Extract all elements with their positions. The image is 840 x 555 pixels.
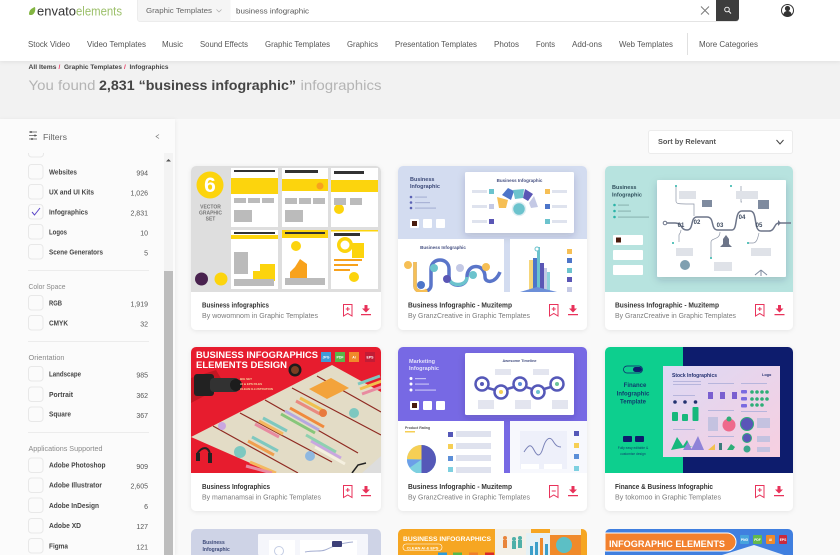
card author: By GranzCreative in Graphic Templates — [408, 492, 530, 502]
filter group: item types: 994 — [136, 170, 148, 178]
thumbnail: green and navy finance — [605, 347, 793, 473]
icon: download — [361, 305, 371, 315]
category links: Photos — [494, 39, 519, 49]
thumbnail: red isometric sheets: AI & EPS FILES — [240, 382, 262, 386]
thumbnail: yellow vector set: 6 — [204, 174, 216, 197]
icon: download — [568, 486, 578, 496]
filters header: Filters — [43, 132, 67, 142]
top navigation bar — [0, 0, 840, 61]
thumbnail: green and navy finance: Infographic — [617, 392, 650, 398]
panel: card lower row orange: CLEAN AI & EPS — [407, 545, 439, 550]
sort dropdown — [648, 130, 792, 154]
thumbnail: green and navy finance: Finance — [624, 383, 647, 389]
filter group: item types: 1,026 — [130, 190, 148, 198]
filter group: applications supported: Adobe XD — [49, 521, 82, 530]
icon: bookmark — [756, 304, 764, 316]
icon: bookmark — [550, 486, 558, 498]
filter group: applications supported: Figma — [49, 542, 69, 550]
thumbnail: blue semicircle: Business — [410, 177, 434, 183]
filter group: color space — [28, 282, 148, 330]
thumbnail: green and navy finance: customise design — [620, 452, 646, 456]
panel: card Business Infographic Muzitemp purple — [398, 347, 587, 511]
card title: Business Infographic - Muzitemp — [615, 300, 719, 310]
card author: By GranzCreative in Graphic Templates — [615, 311, 736, 320]
thumbnail: yellow vector set: VECTOR — [200, 204, 221, 210]
icon: user account — [782, 4, 794, 16]
filter group: item types: 2,831 — [130, 210, 148, 218]
panel: card lower row orange — [398, 529, 587, 555]
thumbnail: teal timeline: 01 — [678, 223, 685, 229]
filter group: orientation — [28, 353, 148, 422]
thumbnail: purple marketing infographic: Marketing — [409, 359, 435, 365]
panel: card lower row grey-blue — [191, 529, 381, 555]
category links: Stock Video — [28, 39, 70, 49]
panel: card lower row grey-blue: Infographic — [202, 547, 230, 553]
panel: card Business Infographic Muzitemp teal — [605, 166, 793, 330]
results heading: infographics — [300, 77, 382, 93]
thumbnail: purple marketing infographic — [398, 347, 587, 474]
filter group: item types: Scene Generators — [49, 248, 103, 256]
thumbnail: blue semicircle — [398, 166, 587, 292]
category links: More Categories — [699, 39, 758, 49]
thumbnail: teal timeline: 05 — [756, 223, 763, 229]
filter group: orientation: Square — [49, 410, 71, 418]
breadcrumb: Graphic Templates — [64, 64, 122, 71]
filter group: item types — [28, 153, 148, 259]
category links: Presentation Templates — [395, 39, 477, 49]
scrollbar — [164, 153, 173, 555]
filter group: applications supported: 127 — [136, 524, 148, 531]
filter group: orientation: 367 — [136, 413, 148, 420]
thumbnail: yellow vector set — [191, 166, 381, 292]
thumbnail: red isometric sheets: CLEAN ILLUSTRATION — [240, 387, 273, 391]
search bar: business infographic — [236, 6, 309, 16]
filter group: item types: Websites — [49, 168, 77, 176]
thumbnail: red isometric sheets: BUSINESS INFOGRAPHICS — [196, 350, 318, 361]
filter group: applications supported: Adobe InDesign — [49, 501, 99, 510]
thumbnail: blue semicircle: Business Infographic — [420, 245, 466, 250]
filter group: applications supported: Applications Supported — [28, 444, 102, 453]
category links: Sound Effects — [200, 39, 248, 49]
search bar — [138, 0, 739, 22]
logo: elements — [76, 4, 122, 18]
filter group: color space: CMYK — [49, 318, 68, 328]
icon: bookmark — [756, 486, 764, 498]
panel: card lower row blue ribbon: EPS — [780, 538, 787, 542]
thumbnail: teal timeline — [605, 166, 793, 292]
logo: envato — [37, 4, 76, 18]
filter group: orientation: 985 — [136, 372, 148, 380]
filter group: color space: Color Space — [28, 282, 66, 291]
results heading — [28, 77, 382, 93]
panel: card lower row blue ribbon: INFOGRAPHIC ELEMENTS — [609, 539, 725, 549]
panel: card lower row blue ribbon: PDF — [754, 538, 761, 542]
filter group: item types: Infographics — [49, 208, 88, 216]
filter group: color space: 32 — [140, 322, 148, 328]
thumbnail: red isometric sheets: ELEMENTS DESIGN — [196, 360, 287, 371]
filter group: orientation: Portrait — [49, 390, 73, 399]
filter group: applications supported: 121 — [136, 544, 148, 552]
card author: By tokomoo in Graphic Templates — [615, 492, 721, 502]
category links: Graphics — [347, 39, 378, 49]
thumbnail: teal timeline: 04 — [739, 215, 746, 221]
thumbnail: red isometric sheets: JPG — [322, 356, 330, 360]
category links: Graphic Templates — [265, 39, 330, 49]
icon: bookmark — [550, 304, 558, 316]
breadcrumb: / — [124, 64, 126, 71]
filter group: applications supported: 2,605 — [130, 484, 148, 490]
card title: Business Infographics — [202, 482, 270, 491]
panel: filters sidebar — [0, 119, 175, 555]
thumbnail: red isometric sheets: Ai — [352, 356, 356, 360]
card author: By GranzCreative in Graphic Templates — [408, 311, 530, 320]
panel: card Business infographics — [191, 166, 381, 330]
panel: card lower row blue ribbon: PNG — [741, 538, 749, 542]
filter group: applications supported — [28, 444, 148, 553]
filter group: item types: 5 — [144, 250, 148, 258]
thumbnail: green and navy finance: Logo — [762, 373, 772, 377]
panel: card lower row grey-blue: Business — [202, 540, 225, 546]
thumbnail: red isometric sheets: PDF — [336, 356, 344, 360]
category links: Video Templates — [87, 39, 146, 49]
icon: download — [568, 305, 578, 315]
panel: card lower row orange: BUSINESS INFOGRAPHICS — [403, 536, 491, 543]
icon: download — [774, 486, 784, 496]
breadcrumb: Infographics — [130, 64, 169, 71]
filter group: applications supported: 6 — [144, 504, 148, 511]
thumbnail: red isometric sheets: BIG SET — [240, 377, 252, 381]
filter group: orientation: Orientation — [28, 353, 64, 362]
results header band — [0, 61, 840, 119]
panel: card lower row blue ribbon — [605, 529, 793, 555]
filter group: applications supported: 909 — [136, 464, 148, 471]
panel: card lower row blue ribbon: Ai — [769, 538, 772, 542]
filter group: color space: 1,919 — [130, 302, 148, 308]
thumbnail: teal timeline: Business — [612, 185, 636, 191]
filter group: item types: UX and UI Kits — [49, 188, 94, 196]
thumbnail: teal timeline: 03 — [717, 223, 724, 229]
category links: Web Templates — [619, 39, 673, 49]
panel: card Finance and Business Infographic — [605, 347, 793, 511]
thumbnail: blue semicircle: Business Infographic — [497, 178, 543, 183]
card author: By mamanamsai in Graphic Templates — [202, 492, 321, 502]
thumbnail: red isometric sheets: EPS — [366, 356, 374, 360]
card author: By wowomnom in Graphic Templates — [202, 311, 318, 320]
card title: Business Infographic - Muzitemp — [408, 482, 512, 491]
panel: card Business Infographics red — [191, 347, 384, 511]
breadcrumb: All Items — [28, 64, 57, 71]
thumbnail: green and navy finance: Stock Infographics — [672, 373, 717, 379]
thumbnail: teal timeline: Infographic — [612, 192, 642, 198]
category links: Music — [162, 39, 184, 49]
category links: Fonts — [536, 39, 555, 49]
filter group: applications supported: Adobe Photoshop — [49, 460, 106, 470]
category links — [28, 33, 758, 55]
thumbnail: purple marketing infographic: Product Rating — [405, 426, 430, 430]
sort dropdown: Sort by Relevant — [658, 137, 716, 146]
filter group: item types: Logos — [49, 228, 67, 236]
card title: Business infographics — [202, 300, 269, 310]
filters header — [0, 119, 175, 153]
icon: bookmark — [344, 304, 352, 316]
thumbnail: yellow vector set: SET — [206, 216, 215, 222]
thumbnail: purple marketing infographic: Infographic — [409, 366, 439, 372]
thumbnail: green and navy finance: Fully easy editable & — [618, 446, 649, 450]
card title: Business Infographic - Muzitemp — [408, 300, 512, 310]
icon: download — [361, 486, 371, 496]
thumbnail: red isometric sheets — [191, 347, 384, 473]
search bar: Graphic Templates — [146, 6, 212, 15]
icon: download — [774, 305, 784, 315]
thumbnail: green and navy finance: Template — [620, 400, 647, 406]
results heading: 2,831 “business infographic” — [99, 77, 296, 93]
thumbnail: teal timeline: 02 — [694, 220, 701, 226]
category links: Add-ons — [572, 39, 602, 49]
card title: Finance & Business Infographic — [615, 482, 713, 491]
results heading: You found — [28, 77, 96, 93]
thumbnail: purple marketing infographic: Awesome Timeline — [502, 359, 537, 363]
icon: bookmark — [344, 486, 352, 498]
panel: card Business Infographic Muzitemp blue — [398, 166, 587, 330]
filter group: orientation: 362 — [136, 393, 148, 400]
filter group: applications supported: Adobe Illustrator — [49, 480, 102, 490]
thumbnail: yellow vector set: GRAPHIC — [199, 210, 222, 216]
breadcrumb: / — [58, 64, 60, 71]
logo — [29, 4, 122, 18]
filter group: orientation: Landscape — [49, 370, 81, 378]
thumbnail: blue semicircle: Infographic — [410, 184, 440, 190]
filter group: item types: 10 — [140, 230, 148, 238]
filter group: color space: RGB — [49, 298, 62, 308]
breadcrumb — [28, 64, 169, 71]
